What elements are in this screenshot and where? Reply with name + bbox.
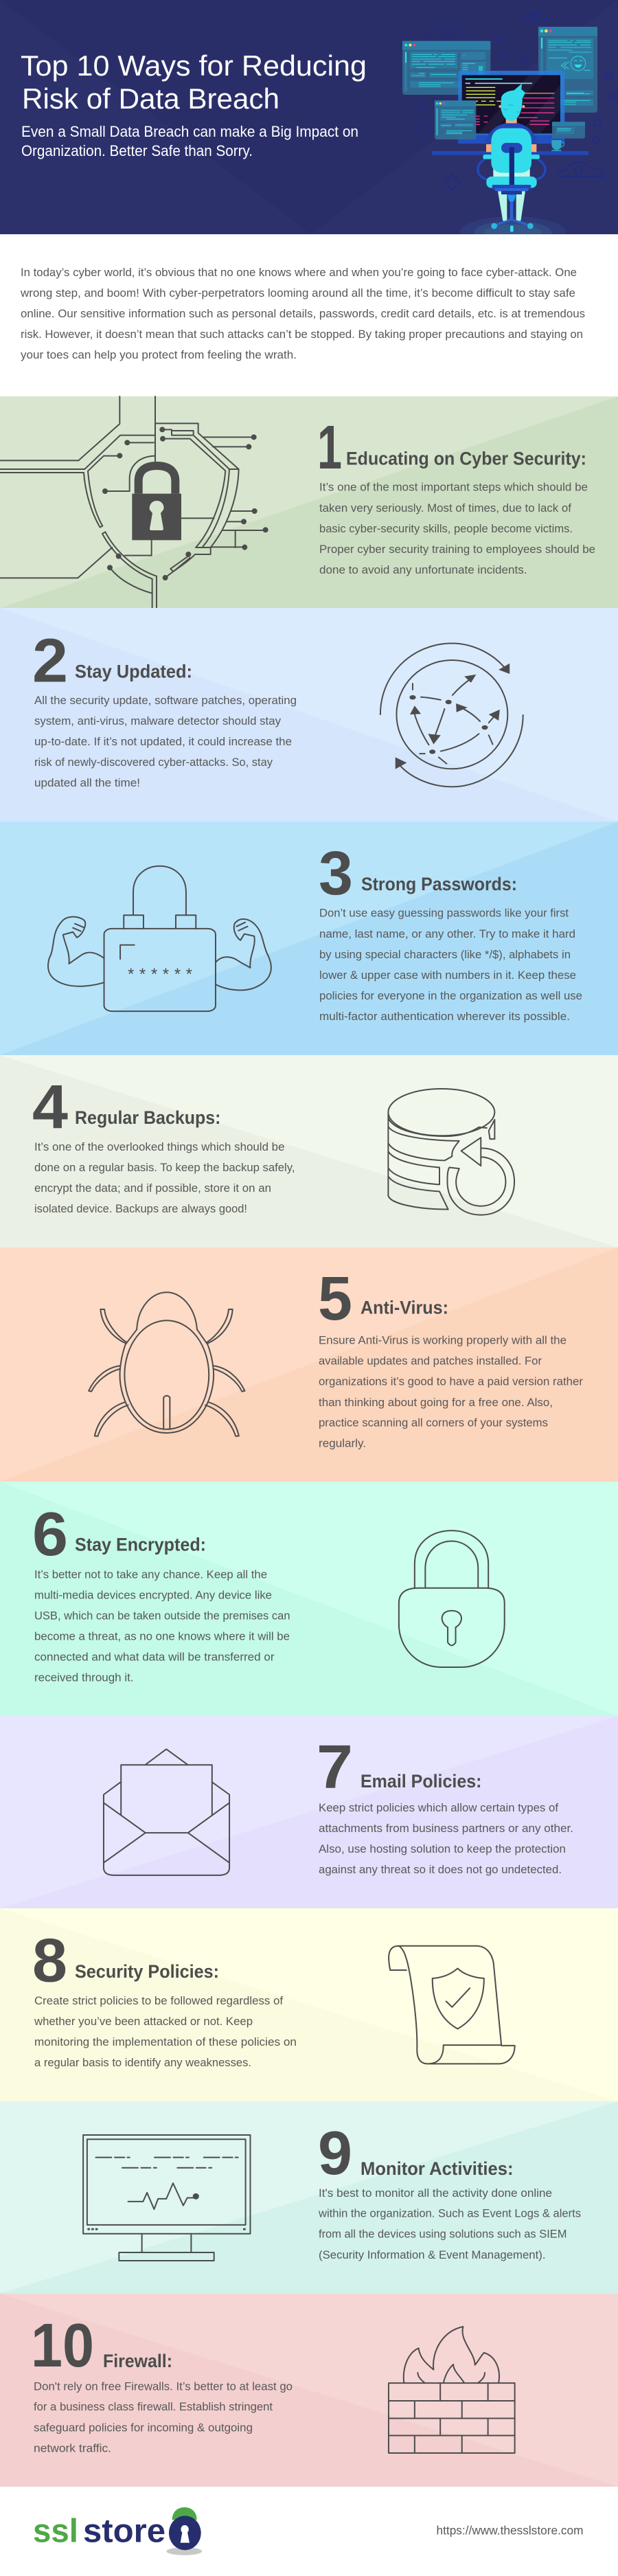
body text: USB, which can be taken outside the premises can xyxy=(34,1610,290,1623)
intro text: online. Our sensitive information such as personal details, passwords, credit card details, etc. is at tremendous xyxy=(21,307,585,320)
body text: than thinking about going for a free one. Also, xyxy=(319,1397,553,1409)
panel 4: regular backups xyxy=(0,1055,618,1247)
body text: encrypt the data; and if possible, store it on an xyxy=(34,1182,271,1195)
body text: for a business class firewall. Establish stringent xyxy=(34,2401,273,2413)
body text: done on a regular basis. To keep the backup safely, xyxy=(34,1162,295,1174)
number 3: 3 xyxy=(319,839,353,908)
number 2: 2 xyxy=(32,627,68,696)
body text xyxy=(319,907,582,1023)
body text: lower & upper case with numbers in it. Keep these xyxy=(319,969,576,982)
body text: Ensure Anti-Virus is working properly with all the xyxy=(319,1335,566,1347)
heading: Monitor Activities: xyxy=(360,2158,514,2179)
body text: policies for everyone in the organization as well use xyxy=(319,990,582,1002)
body text: (Security Information & Event Management). xyxy=(319,2249,545,2261)
panel 3: strong passwords xyxy=(0,822,618,1055)
heading: Stay Updated: xyxy=(75,662,192,682)
icon: open envelope xyxy=(104,1749,229,1875)
intro text: In today’s cyber world, it’s obvious that no one knows where and when you’re going to face cyber-attack. One xyxy=(21,266,577,279)
heading: Strong Passwords: xyxy=(361,874,517,894)
heading: Educating on Cyber Security: xyxy=(346,448,586,468)
number 5: 5 xyxy=(318,1265,352,1333)
body text: Don’t use easy guessing passwords like your first xyxy=(319,907,569,920)
body text: network traffic. xyxy=(34,2443,111,2455)
body text: within the organization. Such as Event Logs & alerts xyxy=(318,2208,581,2220)
heading: Email Policies: xyxy=(360,1771,482,1792)
subtitle xyxy=(21,123,358,159)
intro text xyxy=(0,234,618,396)
body text: isolated device. Backups are always good! xyxy=(34,1203,247,1215)
panel 8: security policies xyxy=(0,1908,618,2101)
body text: It’s one of the overlooked things which should be xyxy=(34,1141,284,1153)
body text: Create strict policies to be followed regardless of xyxy=(34,1995,283,2007)
body text: attachments from business partners or any other. xyxy=(319,1822,573,1835)
body text xyxy=(34,2381,293,2455)
body text: safeguard policies for incoming & outgoing xyxy=(34,2422,253,2434)
intro text: risk. However, it doesn’t mean that such attacks can’t be stopped. By taking proper precautions and staying on xyxy=(21,328,583,341)
body text: connected and what data will be transferred or xyxy=(34,1651,275,1663)
body text xyxy=(34,1141,295,1215)
icon: network update arrows xyxy=(380,643,523,787)
website url: https://www.thesslstore.com xyxy=(437,2524,584,2538)
panel 1: educating on cyber security xyxy=(0,396,618,608)
body text: name, last name, or any other. Try to make it hard xyxy=(319,928,575,940)
title xyxy=(21,49,367,115)
heading: Firewall: xyxy=(103,2351,172,2371)
body text xyxy=(34,694,297,789)
icon: bug xyxy=(89,1292,244,1436)
body text: updated all the time! xyxy=(34,777,140,789)
body text: available updates and patches installed. For xyxy=(319,1355,542,1367)
panel 10: firewall xyxy=(0,2294,618,2487)
body text: become a threat, as no one knows where it will be xyxy=(34,1631,290,1643)
body text: done to avoid any unfortunate incidents. xyxy=(319,564,527,576)
title: Top 10 Ways for Reducing xyxy=(21,49,367,82)
intro text: your toes can help you protect from feeling the wrath. xyxy=(21,348,297,361)
body text xyxy=(34,1569,290,1684)
subtitle: Organization. Better Safe than Sorry. xyxy=(21,142,253,159)
logo: ssl store xyxy=(33,2507,202,2555)
body text: Keep strict policies which allow certain types of xyxy=(319,1802,558,1814)
body text: Proper cyber security training to employees should be xyxy=(319,543,595,556)
intro text: wrong step, and boom! With cyber-perpetrators looming around all the time, it’s become difficult to stay safe xyxy=(20,286,575,300)
subtitle: Even a Small Data Breach can make a Big Impact on xyxy=(21,123,358,140)
body text: practice scanning all corners of your systems xyxy=(319,1417,548,1430)
body text: against any threat so it does not go undetected. xyxy=(319,1864,562,1876)
body text: All the security update, software patches, operating xyxy=(34,694,297,707)
icon: padlock xyxy=(399,1530,505,1667)
body text: from all the devices using solutions such as SIEM xyxy=(319,2228,567,2241)
heading: Regular Backups: xyxy=(75,1107,221,1128)
body text: Don't rely on free Firewalls. It’s better to at least go xyxy=(34,2381,293,2393)
body text: up-to-date. If it’s not updated, it could increase the xyxy=(34,736,292,748)
body text xyxy=(319,482,595,576)
number 8: 8 xyxy=(32,1926,67,1995)
illustration: developer at computer xyxy=(402,12,617,249)
panel 2: stay updated xyxy=(0,608,618,822)
icon: flexing padlock xyxy=(48,866,271,1011)
body text: risk of newly-discovered cyber-attacks. So, stay xyxy=(34,756,273,769)
heading: Stay Encrypted: xyxy=(75,1535,206,1555)
body text: multi-factor authentication wherever its possible. xyxy=(319,1010,570,1023)
body text: It’s one of the most important steps which should be xyxy=(319,482,588,494)
body text xyxy=(319,1802,573,1876)
icon: database backup xyxy=(388,1089,514,1215)
icon: circuit shield padlock xyxy=(0,396,268,608)
number 1: 1 xyxy=(317,414,342,482)
body text xyxy=(318,2187,581,2261)
icon: flexing padlock: ****** xyxy=(128,965,192,984)
panel 6: stay encrypted xyxy=(0,1482,618,1716)
panel 7: email policies xyxy=(0,1716,618,1908)
number 4: 4 xyxy=(32,1073,68,1142)
heading: Security Policies: xyxy=(75,1961,219,1982)
body text: multi-media devices encrypted. Any device like xyxy=(34,1590,272,1602)
logo: ssl store: ssl xyxy=(33,2513,78,2550)
logo: ssl store: store xyxy=(83,2513,165,2550)
body text: organizations it’s good to have a paid version rather xyxy=(319,1375,584,1388)
icon: policy scroll with shield xyxy=(389,1946,515,2064)
body text: regularly. xyxy=(319,1438,366,1450)
body text xyxy=(34,1995,297,2069)
body text: monitoring the implementation of these policies on xyxy=(34,2036,297,2048)
footer xyxy=(33,2507,584,2555)
panel 9: monitor activities xyxy=(0,2101,618,2294)
body text: It’s better not to take any chance. Keep all the xyxy=(34,1569,267,1581)
icon: monitor with pulse xyxy=(83,2135,250,2261)
body text: basic cyber-security skills, people become victims. xyxy=(319,523,573,535)
body text xyxy=(319,1335,584,1450)
panel 5: anti-virus xyxy=(0,1247,618,1482)
number 10: 10 xyxy=(31,2312,94,2380)
number 9: 9 xyxy=(318,2119,352,2188)
heading: Anti-Virus: xyxy=(360,1297,448,1318)
number 6: 6 xyxy=(32,1500,68,1569)
icon: brick wall with flames xyxy=(389,2327,515,2453)
body text: by using special characters (like */$), alphabets in xyxy=(319,949,571,961)
body text: a regular basis to identify any weaknesses. xyxy=(34,2057,251,2069)
panel: header banner xyxy=(0,0,618,249)
body text: system, anti-virus, malware detector should stay xyxy=(34,715,282,727)
title: Risk of Data Breach xyxy=(22,82,279,115)
number 7: 7 xyxy=(317,1733,353,1802)
body text: received through it. xyxy=(34,1671,134,1684)
body text: Also, use hosting solution to keep the protection xyxy=(319,1843,566,1855)
body text: taken very seriously. Most of times, due to lack of xyxy=(319,502,571,515)
body text: whether you’ve been attacked or not. Keep xyxy=(34,2015,253,2028)
body text: It's best to monitor all the activity done online xyxy=(319,2187,552,2200)
